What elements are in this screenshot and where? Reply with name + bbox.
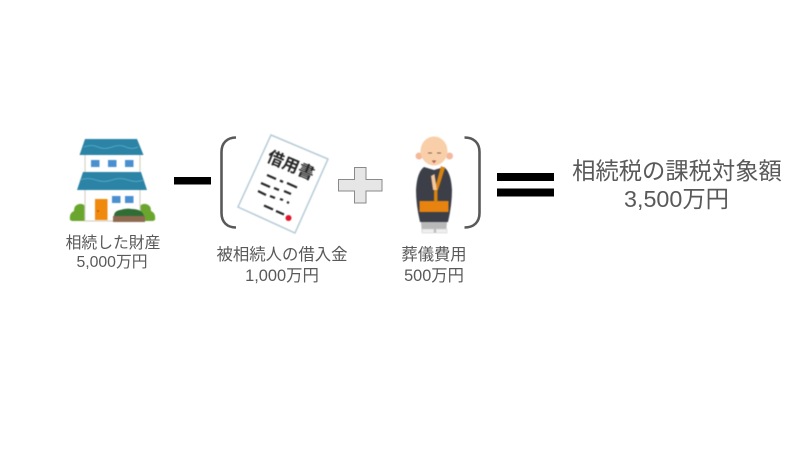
icon: minus sign [174,177,211,184]
icon: equals sign [497,173,554,196]
label: inherited assets: 相続した財産 [66,234,160,252]
label: funeral expenses: 葬儀費用 [401,246,467,264]
icon: loan document: 借用書 [264,146,318,184]
right bracket [464,138,480,228]
label: funeral expenses: 500万円 [404,267,464,285]
result: taxable amount: 相続税の課税対象額 [572,158,782,184]
icon: house [70,139,155,222]
icon: monk [416,136,453,233]
result: taxable amount: 3,500万円 [624,186,729,212]
label: decedent's debts: 被相続人の借入金 [216,246,348,264]
left bracket [222,138,236,228]
icon: loan document [238,135,328,233]
icon: plus sign [338,168,382,203]
label: inherited assets: 5,000万円 [76,254,148,271]
label: decedent's debts: 1,000万円 [245,267,319,285]
